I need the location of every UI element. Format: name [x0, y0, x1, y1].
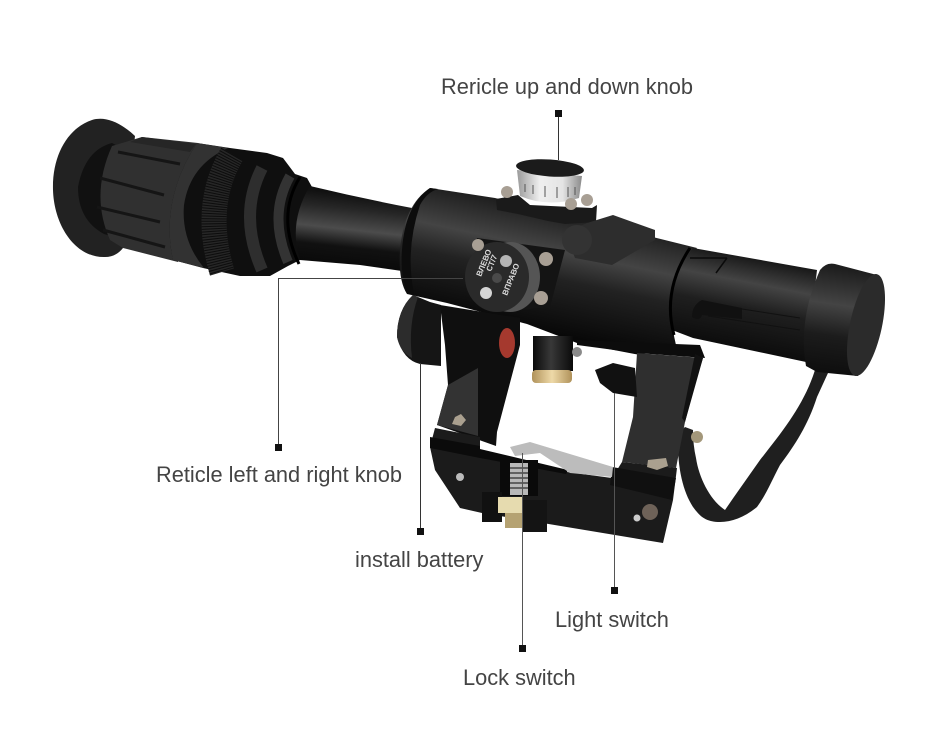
rubber grip [97, 137, 198, 262]
lock screw [482, 460, 547, 532]
callout: Reticle left and right knob [156, 278, 463, 487]
main body [400, 188, 697, 355]
base plate [430, 428, 677, 543]
callout: Reticle left and right knob: Reticle left and right knob [156, 462, 402, 487]
strap [678, 370, 828, 522]
callout: Light switch [555, 393, 669, 632]
top knob [501, 157, 593, 210]
callout: Lock switch: Lock switch [463, 665, 576, 690]
focus ring assembly [170, 143, 312, 276]
tube [296, 186, 412, 271]
callout: Rericle up and down knob: Rericle up and down knob [441, 74, 693, 99]
side knob plate: ВЛЕВО [475, 248, 493, 278]
underside bracket [577, 340, 705, 358]
eyepiece post [532, 336, 582, 383]
callout: install battery [355, 363, 484, 572]
eyecup neck [78, 143, 125, 240]
callout: Rericle up and down knob [441, 74, 693, 160]
side knob plate: СТ/7 [485, 253, 499, 273]
mount arm right [622, 353, 703, 468]
end cap [804, 264, 892, 379]
objective tube [669, 248, 817, 362]
side knob plate: ВПРАВО [501, 262, 521, 297]
body front ring [402, 188, 438, 294]
light switch knob [595, 363, 637, 397]
callout: install battery: install battery [355, 547, 484, 572]
callout: Light switch: Light switch [555, 607, 669, 632]
eyecup [53, 119, 135, 257]
battery knob [397, 295, 441, 366]
callout: Lock switch [463, 453, 576, 690]
locking lever [510, 442, 613, 477]
rear block [562, 215, 655, 265]
mount arm left [437, 305, 520, 446]
rifle scope illustration [53, 119, 892, 543]
side knob plate [465, 238, 565, 312]
top knob base [496, 195, 597, 224]
